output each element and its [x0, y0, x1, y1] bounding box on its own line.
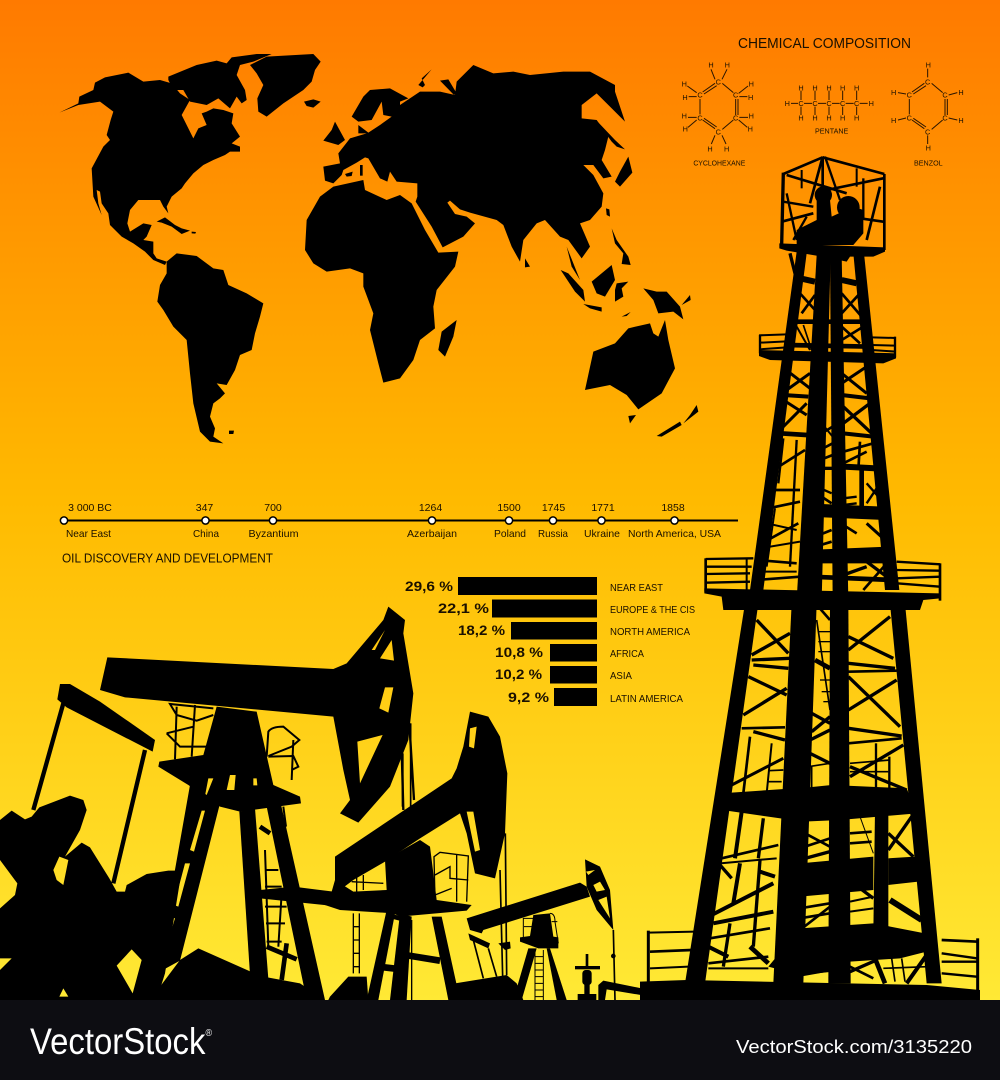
molecule: benzol: H — [958, 88, 964, 97]
image URL text: VectorStock.com/3135220 — [736, 1036, 972, 1057]
molecule: cyclohexane: H — [749, 111, 754, 120]
timeline years: 1264 — [419, 502, 442, 514]
ground block under pump — [150, 948, 253, 1000]
timeline axis — [63, 520, 738, 522]
molecule: cyclohexane: C — [733, 113, 739, 122]
molecule: cyclohexane: H — [724, 145, 729, 154]
timeline markers — [60, 517, 678, 524]
timeline years: 1745 — [542, 502, 565, 514]
molecule: pentane: H — [785, 99, 790, 108]
heavy cross beam — [727, 785, 917, 822]
bar region labels: NORTH AMERICA — [610, 626, 690, 638]
bar region labels: EUROPE & THE CIS — [610, 604, 695, 616]
timeline places: Russia — [538, 528, 568, 540]
molecule: cyclohexane: H — [748, 93, 753, 102]
crown cage — [779, 157, 885, 262]
molecule: benzol: H — [891, 116, 896, 125]
walking beam and horsehead — [100, 607, 413, 823]
foreground machinery mass — [0, 796, 182, 1000]
molecule: benzol: C — [925, 127, 931, 136]
molecule: pentane: H — [840, 113, 845, 122]
molecule: cyclohexane: H — [749, 80, 754, 89]
medium pump jack and small pump jack — [320, 712, 647, 1000]
molecule: benzol: C — [925, 77, 931, 86]
molecule: cyclohexane: C — [716, 127, 722, 136]
medium pump post and platform — [320, 840, 472, 917]
molecule: pentane: H — [854, 113, 859, 122]
mid platform and railing — [759, 350, 896, 363]
bar percentages: 10,8 % — [495, 644, 544, 660]
bar percentages: 22,1 % — [438, 600, 490, 616]
molecule: pentane: C — [812, 99, 818, 108]
molecule: pentane: H — [798, 83, 804, 92]
timeline years: 3 000 BC — [68, 502, 112, 514]
timeline places: North America, USA — [628, 528, 721, 540]
molecule: pentane — [785, 83, 874, 135]
map: the Americas and Greenland — [59, 54, 321, 443]
bars — [458, 577, 597, 706]
lower lattice — [708, 812, 927, 983]
molecule: benzol: C — [942, 113, 948, 122]
drilling derrick — [640, 157, 980, 1000]
molecule: pentane: PENTANE — [815, 128, 849, 135]
molecule: cyclohexane: CYCLOHEXANE — [693, 160, 746, 167]
derrick base deck — [640, 980, 980, 1000]
VectorStock logo text: VectorStock — [30, 1021, 227, 1062]
molecule: pentane: C — [798, 99, 804, 108]
lower legs — [685, 603, 758, 983]
molecule: cyclohexane: H — [707, 145, 713, 154]
chemical title: CHEMICAL COMPOSITION — [738, 36, 911, 52]
world map — [59, 54, 698, 443]
timeline places: China — [193, 528, 219, 540]
map: Eurasia, Africa and Australia — [305, 65, 698, 437]
molecule: pentane: H — [812, 83, 818, 92]
timeline years: 347 — [196, 502, 213, 514]
pitman rods — [33, 703, 411, 883]
molecule: benzol: H — [926, 60, 931, 69]
oil reserves bar chart — [405, 577, 695, 706]
molecule: cyclohexane: H — [682, 93, 688, 102]
base railings — [648, 931, 978, 993]
bar region labels — [610, 582, 695, 705]
molecule: benzol — [891, 60, 964, 167]
medium pump braces and ground — [378, 915, 440, 970]
bar region labels: LATIN AMERICA — [610, 693, 683, 705]
small pump crank — [468, 933, 490, 948]
molecule: cyclohexane: C — [697, 91, 703, 100]
timeline — [60, 502, 738, 566]
panel X-bracing — [732, 607, 907, 793]
molecule: cyclohexane: H — [725, 60, 730, 69]
molecule: cyclohexane: C — [716, 77, 722, 86]
VectorStock logo text: ® — [205, 1028, 213, 1039]
molecule: cyclohexane: H — [682, 80, 687, 89]
bar percentages: 9,2 % — [508, 689, 550, 705]
timeline heading: OIL DISCOVERY AND DEVELOPMENT — [62, 550, 273, 566]
molecule: pentane: H — [798, 113, 804, 122]
molecule: cyclohexane: H — [708, 60, 714, 69]
timeline places: Near East — [66, 528, 111, 540]
center and right legs — [239, 808, 270, 1000]
molecule: benzol: H — [926, 144, 931, 153]
molecule: cyclohexane: H — [682, 111, 687, 120]
timeline places: Ukraine — [584, 528, 620, 540]
molecule: pentane: H — [854, 83, 859, 92]
molecule: benzol: C — [942, 91, 948, 100]
timeline years: 1500 — [497, 502, 521, 514]
timeline years: 1771 — [591, 502, 615, 514]
timeline places — [66, 528, 721, 540]
molecule: cyclohexane: H — [683, 124, 688, 133]
derrick legs — [750, 252, 807, 590]
derrick upper section — [704, 157, 940, 610]
small pump beam — [467, 883, 590, 933]
connecting brace — [260, 887, 340, 907]
timeline years: 1858 — [661, 502, 685, 514]
small pump ladder and railings — [523, 913, 558, 1000]
wellhead valve — [575, 954, 600, 1000]
timeline places: Azerbaijan — [407, 528, 457, 540]
molecule: pentane: C — [854, 99, 860, 108]
medium pump beam and horsehead — [335, 712, 507, 890]
front-left leg with ladder slots — [157, 785, 220, 973]
molecule: pentane: C — [840, 99, 846, 108]
pipe — [598, 981, 647, 1000]
bar region labels: AFRICA — [610, 648, 644, 660]
molecule: benzol: C — [907, 113, 913, 122]
pump railings — [167, 704, 299, 780]
crank arm — [57, 684, 155, 752]
molecule: benzol: H — [958, 116, 964, 125]
timeline places: Byzantium — [248, 528, 299, 540]
bar percentages — [405, 578, 550, 705]
molecule: pentane: H — [840, 83, 845, 92]
timeline years: 700 — [264, 502, 282, 514]
timeline years — [68, 502, 685, 514]
molecule: cyclohexane: C — [733, 91, 739, 100]
bar percentages: 10,2 % — [495, 666, 543, 682]
molecule: cyclohexane: C — [697, 113, 703, 122]
molecule diagrams — [682, 60, 964, 167]
molecule: cyclohexane: H — [748, 124, 753, 133]
footer background — [0, 1000, 1000, 1080]
bar region labels: ASIA — [610, 670, 632, 682]
watermark footer bar — [0, 1000, 1000, 1080]
molecule: pentane: H — [812, 113, 818, 122]
molecule: benzol: H — [891, 88, 896, 97]
bar region labels: NEAR EAST — [610, 582, 664, 594]
medium pump legs — [367, 910, 395, 1000]
molecule: pentane: H — [869, 99, 874, 108]
samson post frame and platform — [158, 707, 301, 812]
bar percentages: 29,6 % — [405, 578, 454, 594]
molecule: benzol: BENZOL — [914, 160, 943, 167]
bar percentages: 18,2 % — [458, 622, 506, 638]
medium pump railing and rods — [352, 723, 615, 1000]
large pump jack — [0, 607, 413, 1000]
small pump horsehead — [585, 859, 613, 930]
molecule: pentane: H — [826, 83, 832, 92]
ladder and braces — [260, 807, 297, 980]
chemical composition section — [682, 36, 964, 167]
oil pump jacks — [0, 607, 647, 1000]
upper bracing — [757, 253, 893, 590]
molecule: pentane: H — [826, 113, 832, 122]
derrick lower section — [640, 603, 980, 1000]
molecule: pentane: C — [826, 99, 832, 108]
molecule: cyclohexane — [682, 60, 754, 167]
timeline places: Poland — [494, 528, 526, 540]
lower platform railing — [706, 558, 940, 601]
molecule: benzol: C — [907, 91, 913, 100]
lower platform deck — [704, 588, 940, 610]
small pump frame — [520, 913, 558, 948]
